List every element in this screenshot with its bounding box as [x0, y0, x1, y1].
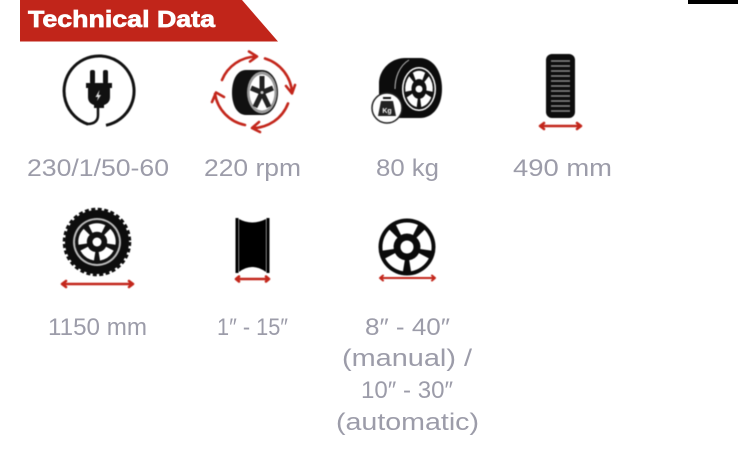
icon: rotating tyre [212, 52, 295, 132]
label: speed: 220 rpm [204, 155, 301, 182]
icon: power plug [64, 56, 134, 125]
title banner [20, 0, 278, 42]
label: weight: 80 kg [376, 155, 439, 182]
corner black bar [688, 0, 738, 4]
label: rim diameter range: (automatic) [336, 409, 479, 436]
label: rim diameter range: (manual) / [342, 345, 472, 372]
label: rim diameter range: 8″ - 40″ [365, 314, 451, 341]
icon: wheel diameter [378, 218, 436, 280]
label: rim width range: 1″ - 15″ [217, 314, 288, 341]
icon: rim width [236, 218, 270, 282]
icon: tyre width [540, 54, 581, 129]
title banner: Technical Data [28, 6, 215, 32]
icon: tyre with weight [372, 58, 442, 123]
label: rim diameter range: 10″ - 30″ [361, 377, 453, 404]
label: voltage: 230/1/50-60 [27, 155, 169, 182]
icon: tyre diameter [62, 209, 133, 287]
label: max tyre diameter: 1150 mm [48, 314, 147, 341]
label: tyre width: 490 mm [513, 155, 612, 182]
label: rim diameter range [336, 314, 479, 436]
icon: tyre with weight: Kg [382, 108, 392, 115]
